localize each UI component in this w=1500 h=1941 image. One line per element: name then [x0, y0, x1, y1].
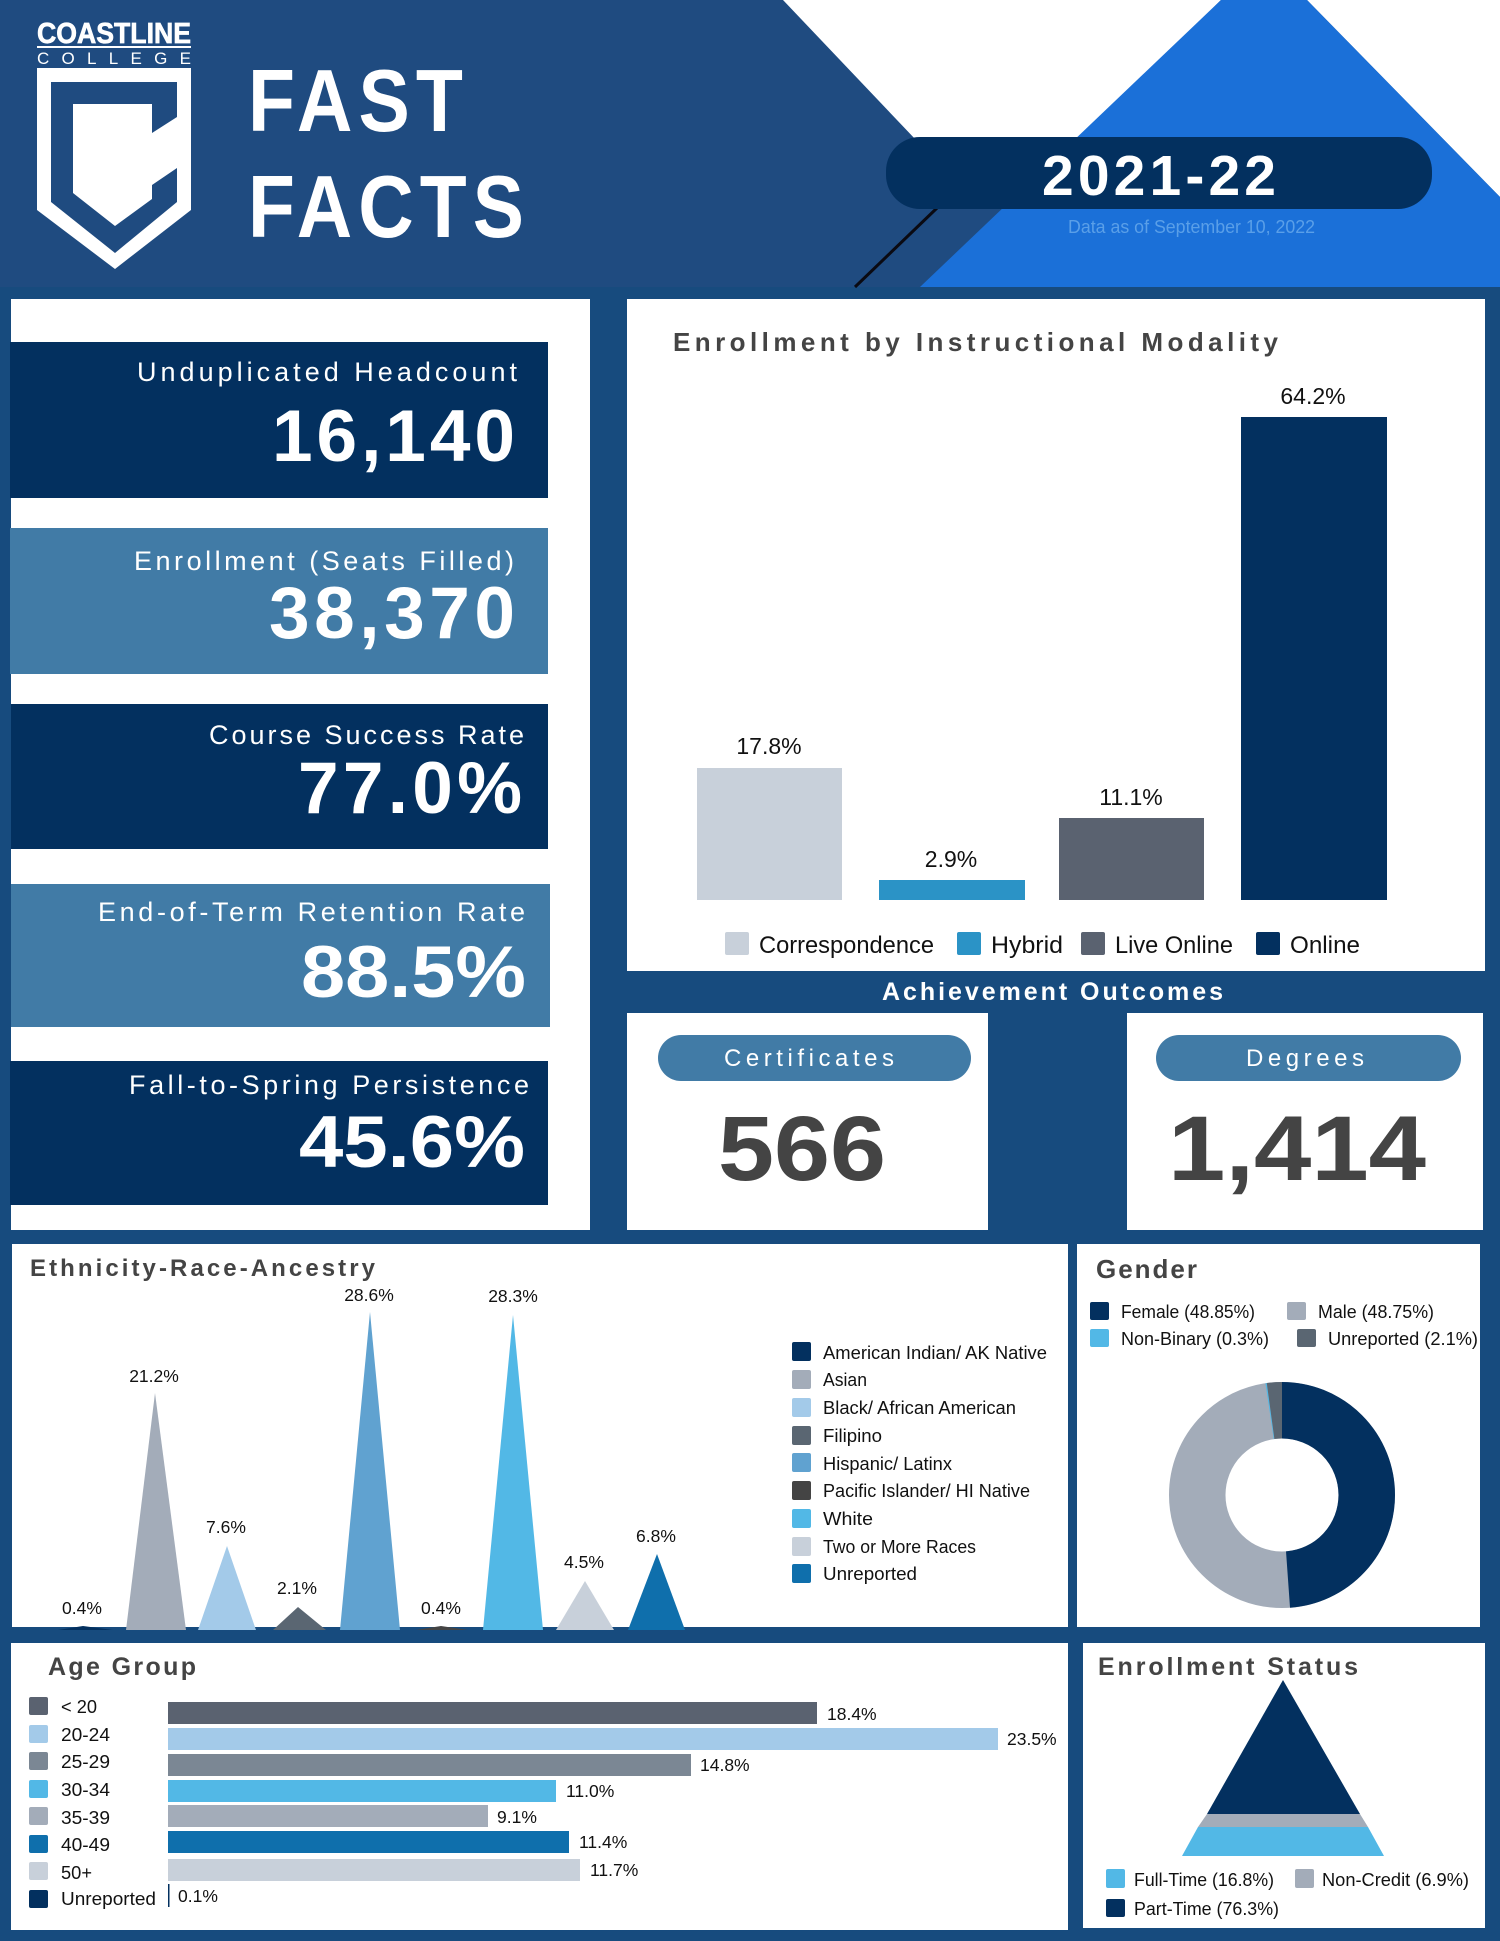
title: Fast Facts: FAST [248, 51, 469, 150]
pyramid chart: enrollment status [1182, 1680, 1384, 1856]
panel: gender [1077, 1244, 1480, 1627]
legend: gender: Male (48.75%) [1318, 1302, 1434, 1322]
logo: Coastline College [37, 18, 191, 269]
metric: enrollment seats filled: Enrollment (Seats Filled) [134, 546, 514, 576]
legend: age group: 50+ [61, 1863, 92, 1883]
metric: course success rate: 77.0% [298, 748, 522, 829]
triangle chart: ethnicity: 4.5% [564, 1552, 604, 1572]
legend: modality: Live Online [1115, 932, 1233, 959]
metric: unduplicated headcount [10, 342, 548, 498]
legend: age group: 25-29 [61, 1752, 110, 1772]
legend: gender [1090, 1302, 1478, 1349]
legend: ethnicity: White [823, 1509, 873, 1529]
metric: persistence: 45.6% [299, 1102, 525, 1183]
metric: retention rate: 88.5% [301, 932, 526, 1013]
triangle chart: ethnicity: 0.4% [421, 1598, 461, 1618]
metric: persistence [10, 1061, 548, 1205]
triangle chart: ethnicity: 21.2% [129, 1366, 179, 1386]
triangle chart: ethnicity: 28.6% [344, 1285, 394, 1305]
triangle chart: ethnicity: 7.6% [206, 1517, 246, 1537]
panel: certificates: 566 [718, 1098, 886, 1200]
panel: degrees: 1,414 [1168, 1098, 1426, 1200]
triangle chart: ethnicity: 28.3% [488, 1286, 538, 1306]
bar chart: modality [697, 383, 1387, 900]
bar chart: age group [168, 1702, 1057, 1907]
triangle chart: ethnicity [58, 1285, 685, 1630]
legend: modality: Hybrid [991, 932, 1063, 959]
bar chart: modality: 11.1% [1099, 784, 1163, 810]
panel: certificates [627, 1013, 988, 1230]
legend: ethnicity: American Indian/ AK Native [823, 1343, 1047, 1363]
panel: degrees [1127, 1013, 1483, 1230]
bar chart: age group: 11.4% [579, 1832, 627, 1852]
year pill: 2021-22 [1042, 144, 1276, 208]
bar chart: age group: 0.1% [178, 1886, 218, 1906]
legend: enrollment status [1106, 1869, 1469, 1919]
panel: degrees: Degrees [1246, 1045, 1364, 1072]
bar chart: modality: 2.9% [925, 846, 977, 872]
logo: Coastline College: COLLEGE [37, 49, 191, 68]
bar chart: age group: 11.0% [566, 1781, 614, 1801]
legend: age group: Unreported [61, 1889, 156, 1909]
legend: ethnicity: Black/ African American [823, 1398, 1016, 1418]
title: Fast Facts: FACTS [248, 157, 530, 256]
year pill [886, 137, 1432, 209]
heading: modality: Enrollment by Instructional Modality [673, 327, 1279, 357]
bar chart: age group: 14.8% [700, 1755, 750, 1775]
triangle chart: ethnicity: 0.4% [62, 1598, 102, 1618]
legend: age group: 20-24 [61, 1725, 110, 1745]
bar chart: modality: 17.8% [736, 733, 802, 759]
heading: age group: Age Group [48, 1653, 196, 1681]
legend: ethnicity: Pacific Islander/ HI Native [823, 1481, 1030, 1501]
legend: gender: Unreported (2.1%) [1328, 1329, 1478, 1349]
legend: ethnicity: Unreported [823, 1564, 917, 1584]
legend: enrollment status: Part-Time (76.3%) [1134, 1899, 1279, 1919]
panel: enrollment by instructional modality [627, 299, 1485, 971]
panel: age group [11, 1643, 1068, 1930]
legend: age group: 30-34 [61, 1780, 110, 1800]
metric: unduplicated headcount: Unduplicated Headcount [137, 357, 517, 387]
bar chart: modality: 64.2% [1280, 383, 1346, 409]
logo: Coastline College: COASTLINE [37, 18, 191, 50]
bar chart: age group: 23.5% [1007, 1729, 1057, 1749]
legend: ethnicity: Filipino [823, 1426, 882, 1446]
legend: enrollment status: Full-Time (16.8%) [1134, 1870, 1274, 1890]
metric: course success rate: Course Success Rate [209, 720, 524, 750]
legend: modality: Correspondence [759, 932, 934, 959]
legend: ethnicity: Hispanic/ Latinx [823, 1454, 952, 1474]
metric: enrollment seats filled: 38,370 [269, 573, 515, 654]
metric: retention rate: End-of-Term Retention Rate [98, 897, 525, 927]
title: Fast Facts [248, 51, 530, 256]
triangle chart: ethnicity: 6.8% [636, 1526, 676, 1546]
legend: ethnicity: Asian [823, 1370, 867, 1390]
legend: modality: Online [1290, 932, 1360, 959]
heading: gender: Gender [1096, 1254, 1197, 1284]
legend: gender: Female (48.85%) [1121, 1302, 1255, 1322]
header banner [0, 0, 1500, 287]
metric: persistence: Fall-to-Spring Persistence [129, 1070, 529, 1100]
legend: ethnicity [792, 1342, 1047, 1584]
heading: enrollment status: Enrollment Status [1098, 1653, 1358, 1681]
legend: age group: < 20 [61, 1697, 97, 1717]
panel: certificates: Certificates [724, 1045, 894, 1072]
bar chart: age group: 11.7% [590, 1860, 638, 1880]
legend: ethnicity: Two or More Races [823, 1537, 976, 1557]
legend: age group: 35-39 [61, 1808, 110, 1828]
panel: key metrics [10, 299, 590, 1230]
triangle chart: ethnicity: 2.1% [277, 1578, 317, 1598]
heading: ethnicity: Ethnicity-Race-Ancestry [30, 1255, 376, 1282]
heading: achievement outcomes: Achievement Outcomes [882, 978, 1223, 1006]
panel: ethnicity-race-ancestry [12, 1244, 1068, 1630]
metric: course success rate [11, 704, 548, 849]
legend: age group [29, 1697, 156, 1909]
legend: modality [725, 932, 1360, 959]
legend: age group: 40-49 [61, 1835, 110, 1855]
bar chart: age group: 18.4% [827, 1704, 877, 1724]
panel: enrollment status [1083, 1643, 1485, 1928]
metric: enrollment seats filled [10, 528, 548, 674]
data date note: Data as of September 10, 2022 [1068, 217, 1315, 237]
bar chart: age group: 9.1% [497, 1807, 537, 1827]
legend: enrollment status: Non-Credit (6.9%) [1322, 1870, 1469, 1890]
metric: unduplicated headcount: 16,140 [272, 396, 515, 477]
donut chart: gender [1197, 1410, 1367, 1580]
legend: gender: Non-Binary (0.3%) [1121, 1329, 1269, 1349]
metric: retention rate [11, 884, 550, 1027]
